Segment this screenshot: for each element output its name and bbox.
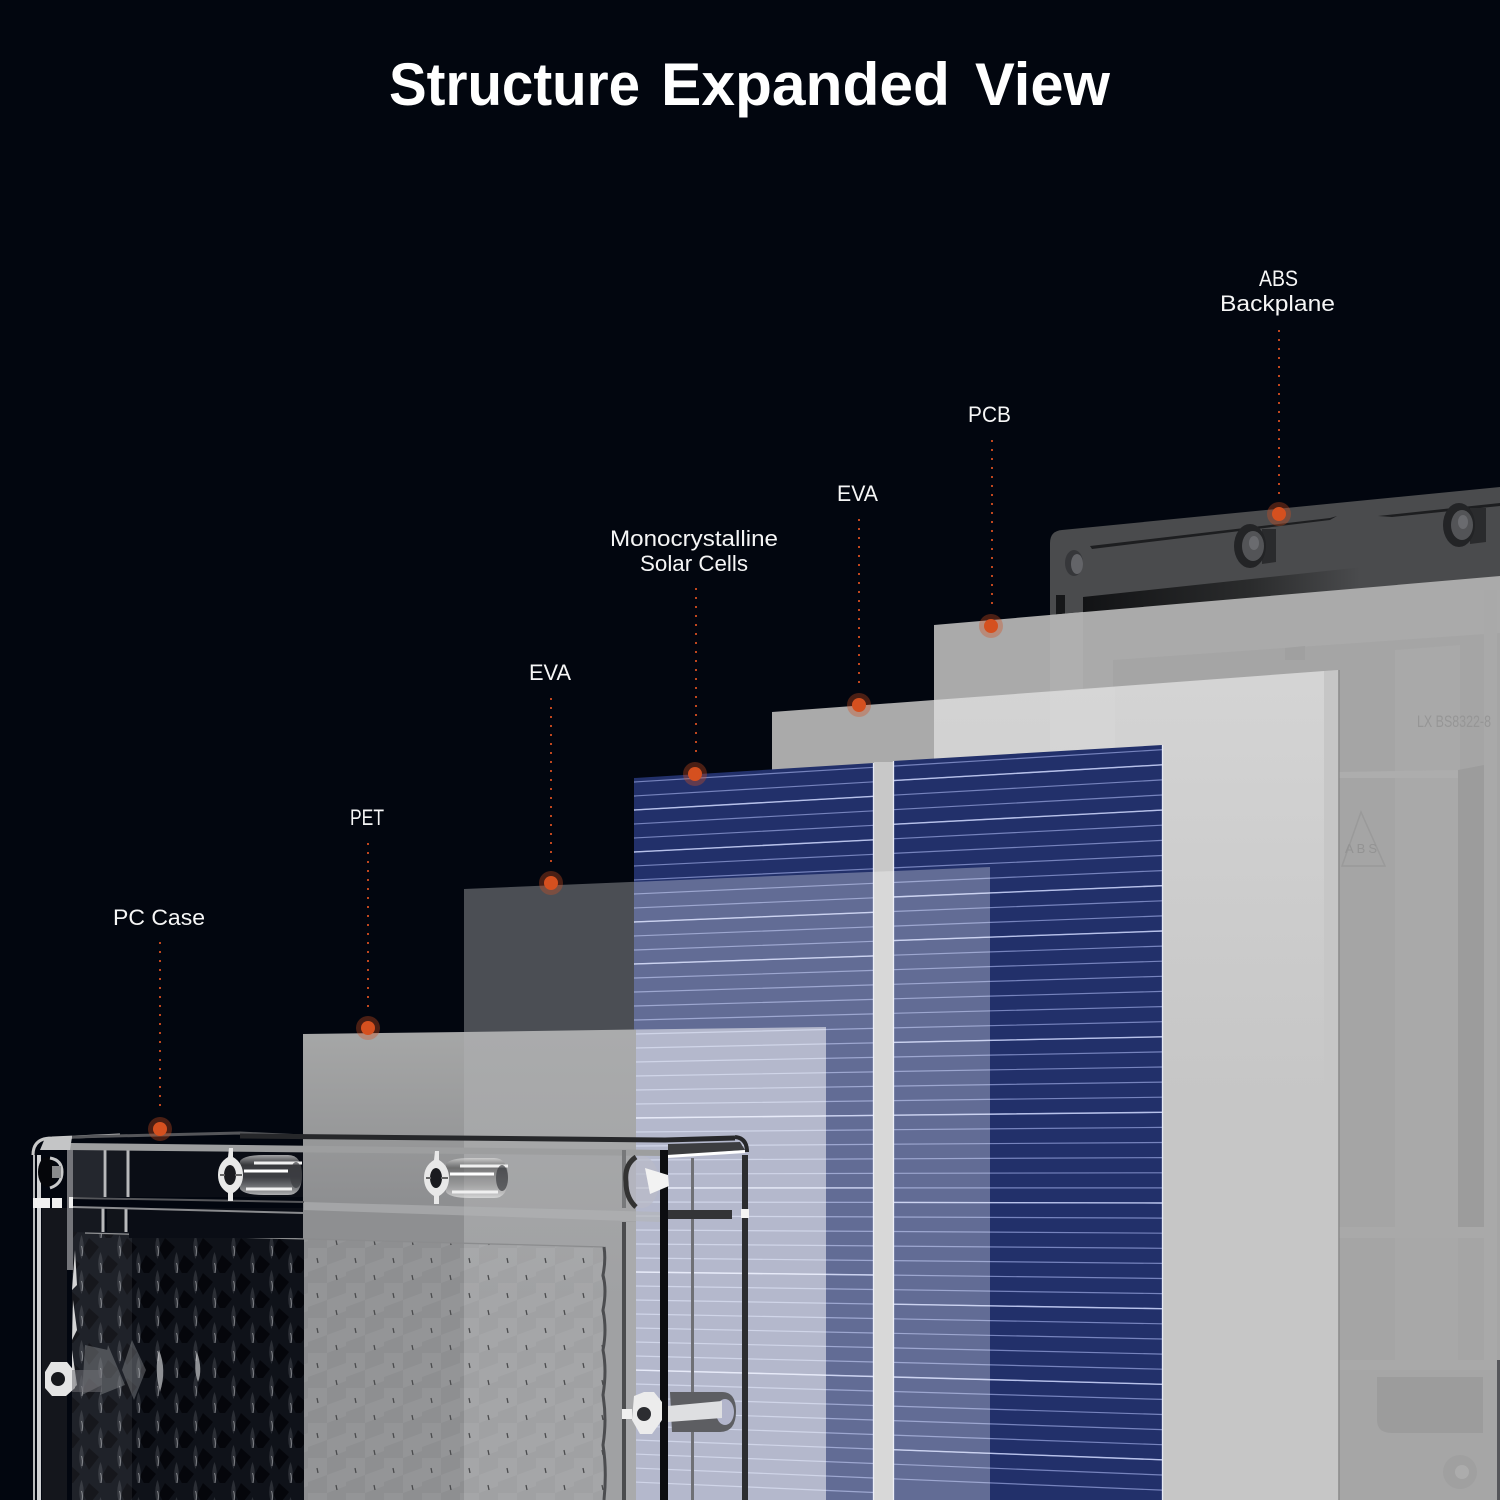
icon: ABS recycling mark: ABS — [1345, 841, 1377, 856]
frame tints — [73, 1150, 103, 1197]
callout: Monocrystalline Solar Cells: Monocrystalline — [610, 526, 778, 551]
title — [389, 51, 1110, 118]
screw boss 1 — [218, 1148, 302, 1201]
callout: PET: PET — [350, 805, 384, 830]
icon: screw hole right — [1443, 503, 1486, 547]
frame verticals — [103, 1150, 128, 1232]
lens texture on PET — [304, 1239, 606, 1500]
callout: PCB — [968, 402, 1011, 638]
icon: ABS recycling mark — [1342, 812, 1385, 866]
bright busbars — [634, 765, 1162, 1460]
left cell busbars — [634, 767, 874, 1492]
outer top edge — [33, 1135, 120, 1155]
layer: PCB — [934, 576, 1500, 1500]
callout: ABS Backplane — [1220, 266, 1335, 526]
icon: corner hole — [1065, 550, 1083, 576]
screw boss 2 — [424, 1151, 508, 1204]
screw boss 4 — [45, 1362, 102, 1396]
callout: ABS Backplane: Backplane — [1220, 291, 1335, 316]
reflective lens highlights — [72, 1232, 200, 1500]
screw boss 5 — [622, 1392, 736, 1434]
icon: screw hole — [1234, 524, 1276, 568]
callout: EVA rear — [837, 481, 878, 717]
screw boss 3 — [625, 1156, 669, 1208]
callout: PET — [350, 805, 384, 1040]
icon: moulded boss — [1443, 1455, 1477, 1489]
callout: PC Case: PC Case — [113, 905, 205, 930]
callout: EVA front: EVA — [529, 660, 571, 685]
callout: ABS Backplane: ABS — [1259, 266, 1298, 291]
callout: PCB: PCB — [968, 402, 1011, 427]
right cell busbars — [893, 750, 1162, 1490]
callout: EVA rear: EVA — [837, 481, 878, 506]
layer: ABS backplane — [1050, 487, 1500, 1500]
title: View — [975, 51, 1110, 118]
layer: EVA front sheet — [464, 867, 990, 1500]
layer: monocrystalline solar cells — [634, 745, 1162, 1500]
frame horizontals — [70, 1143, 664, 1156]
callout: Monocrystalline Solar Cells: Solar Cells — [640, 551, 748, 576]
icon: corner ring — [38, 1157, 62, 1188]
layer: PC case — [33, 1133, 749, 1500]
layer: EVA rear sheet — [772, 670, 1340, 1500]
callout: Monocrystalline Solar Cells — [610, 526, 778, 786]
title: Expanded — [661, 51, 950, 118]
lens texture on dark — [72, 1232, 304, 1500]
callout: EVA front — [529, 660, 571, 895]
right frame verticals — [622, 1150, 626, 1208]
callout: PC Case — [113, 905, 205, 1141]
title: Structure — [389, 51, 640, 118]
layer: PET sheet — [303, 1027, 826, 1500]
